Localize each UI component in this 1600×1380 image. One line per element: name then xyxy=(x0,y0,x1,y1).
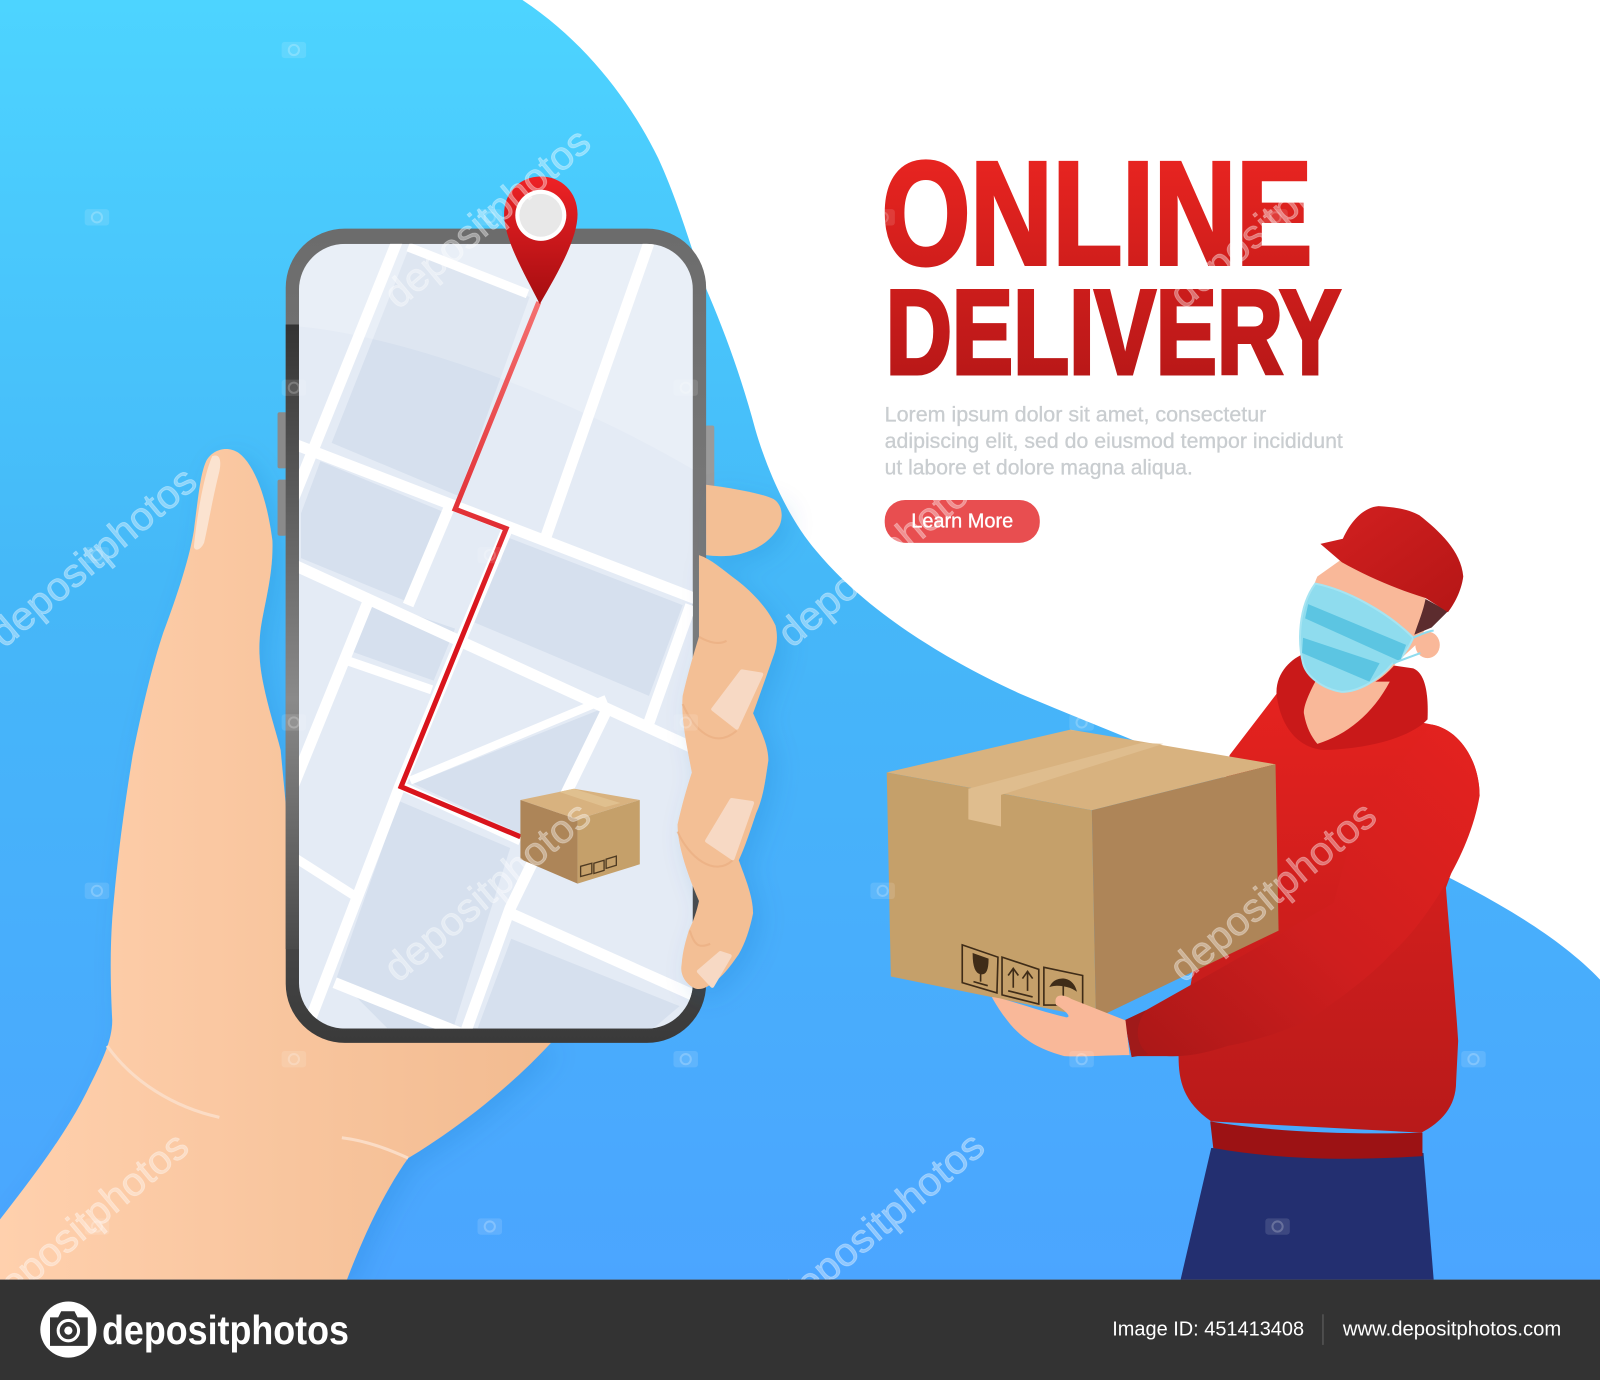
map pin xyxy=(504,177,578,304)
thumb nail xyxy=(194,455,220,550)
watermark text: depositphotos xyxy=(769,458,993,656)
hoodie body xyxy=(1179,694,1480,1133)
finger creases xyxy=(678,637,737,946)
map base xyxy=(299,244,693,1029)
head xyxy=(1306,559,1426,686)
screen gloss xyxy=(311,244,692,280)
hand under parcel xyxy=(992,996,1130,1056)
watermark text: depositphotos xyxy=(1161,119,1385,317)
watermark text: depositphotos xyxy=(769,1123,993,1321)
phone left dark edge xyxy=(286,324,299,949)
map blocks xyxy=(301,250,683,1029)
watermark text: depositphotos xyxy=(375,119,599,317)
side buttons xyxy=(278,412,714,536)
hair xyxy=(1414,599,1448,635)
sleeve cuff xyxy=(1124,1010,1148,1057)
ear xyxy=(1415,632,1440,658)
button: learn more: Learn More xyxy=(911,511,1013,533)
hand holding phone xyxy=(0,449,551,1280)
face mask xyxy=(1300,584,1434,692)
heading line 1: ONLINE xyxy=(882,132,1312,296)
small parcel xyxy=(520,789,640,884)
fingers xyxy=(678,485,782,989)
body text: ut labore et dolore magna aliqua. xyxy=(885,456,1193,479)
curled fingers xyxy=(678,555,777,989)
footer bar xyxy=(0,1280,1600,1380)
website: www.depositphotos.com xyxy=(1342,1319,1561,1341)
phone screen map xyxy=(281,237,704,1036)
button: learn more xyxy=(885,500,1040,543)
watermark text: depositphotos xyxy=(375,793,599,991)
parcel top xyxy=(887,730,1276,810)
heading line 2: DELIVERY xyxy=(886,265,1341,399)
finger nails xyxy=(699,671,761,986)
packing tape xyxy=(968,743,1163,827)
body text: adipiscing elit, sed do eiusmod tempor incididunt xyxy=(885,430,1343,453)
neck xyxy=(1304,682,1390,744)
index finger xyxy=(706,485,782,556)
parcel left face xyxy=(887,772,1096,1018)
body text: Lorem ipsum dolor sit amet, consectetur xyxy=(885,403,1266,426)
arm sleeve xyxy=(1124,724,1480,1056)
image id: Image ID: 451413408 xyxy=(1112,1319,1304,1341)
watermark text: depositphotos xyxy=(1161,793,1385,991)
large parcel xyxy=(887,730,1279,1018)
watermark camera icons xyxy=(85,42,1486,1235)
hood xyxy=(1276,653,1428,750)
trousers xyxy=(1181,1148,1434,1280)
heading: online delivery xyxy=(882,132,1341,399)
parcel right face xyxy=(1092,764,1279,1018)
palm crease lines xyxy=(107,1046,408,1158)
handling icon: fragile xyxy=(962,945,998,993)
phone xyxy=(278,177,714,1043)
footer logo: depositphotos xyxy=(102,1307,349,1353)
body text xyxy=(885,403,1343,479)
cap xyxy=(1320,506,1463,612)
hoodie waistband xyxy=(1210,1121,1422,1159)
handling icon: keep dry xyxy=(1044,967,1083,1005)
delivery man xyxy=(887,506,1480,1280)
delivery route xyxy=(401,302,539,837)
map roads xyxy=(281,237,704,1036)
phone body xyxy=(286,229,706,1043)
handling icon: this way up xyxy=(1002,957,1039,1004)
footer logo xyxy=(40,1302,349,1358)
